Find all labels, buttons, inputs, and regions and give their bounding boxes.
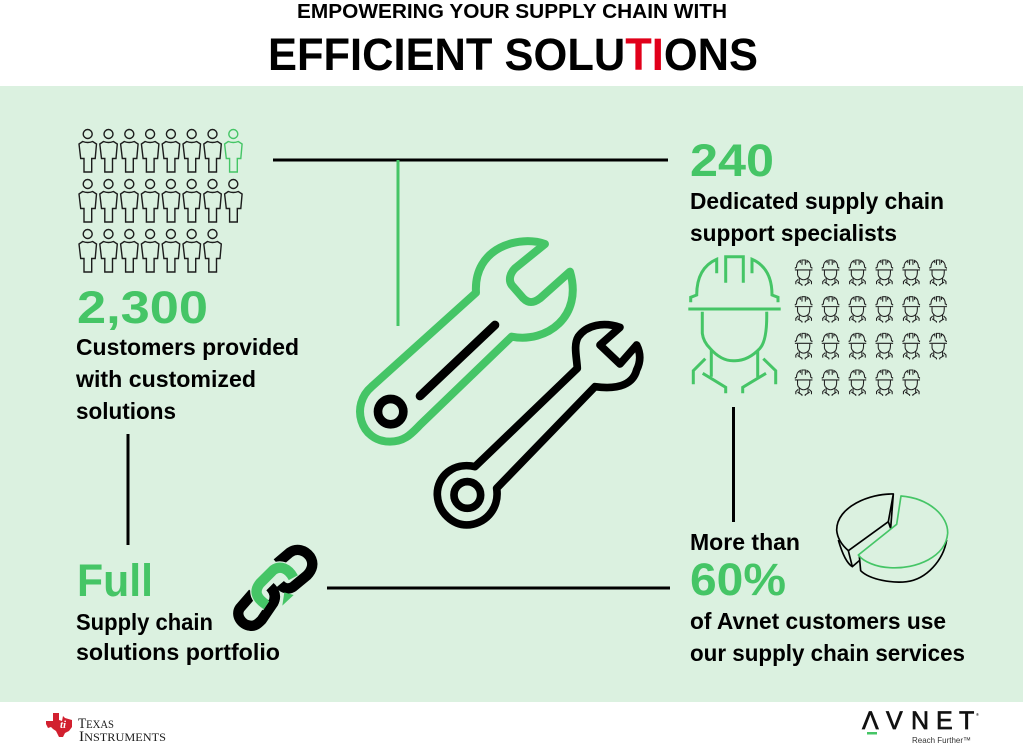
stat: 2,300 customers: 2,300 bbox=[77, 282, 208, 333]
stat: full portfolio: solutions portfolio bbox=[76, 639, 280, 665]
stat: more than 60% bbox=[690, 529, 965, 666]
connector: left vertical bbox=[126, 434, 130, 545]
title bbox=[268, 1, 758, 80]
title: EMPOWERING YOUR SUPPLY CHAIN WITH bbox=[297, 1, 727, 23]
icon: large green worker with hard hat bbox=[688, 257, 781, 393]
stat: 2,300 customers: Customers provided bbox=[76, 334, 299, 360]
logo: Texas Instruments: ti bbox=[60, 719, 67, 731]
stat: full portfolio: Supply chain bbox=[76, 609, 213, 635]
connector: green vertical to wrench bbox=[396, 160, 400, 326]
stat: full portfolio: Full bbox=[77, 555, 153, 606]
logo: Texas Instruments bbox=[46, 713, 166, 744]
icon: customers pictogram bbox=[79, 130, 242, 272]
stat: more than 60%: of Avnet customers use bbox=[690, 608, 946, 634]
logo: Texas Instruments: TEXAS bbox=[78, 716, 114, 732]
icon: green wrench bbox=[360, 241, 573, 442]
stat: full portfolio bbox=[76, 555, 280, 665]
stat: more than 60%: More than bbox=[690, 529, 800, 555]
icon: chain link bbox=[238, 550, 312, 626]
stat: 240 specialists: Dedicated supply chain bbox=[690, 188, 944, 214]
stat: 240 specialists bbox=[690, 135, 944, 246]
stat: 2,300 customers: solutions bbox=[76, 398, 176, 424]
icon: black wrench bbox=[437, 325, 640, 525]
connector: bottom horizontal bbox=[327, 586, 670, 590]
stat: 2,300 customers bbox=[75, 282, 299, 424]
connector: top horizontal bbox=[273, 158, 668, 162]
logo: Avnet: ® bbox=[976, 712, 979, 717]
icon: specialists pictogram bbox=[795, 260, 947, 396]
stat: 240 specialists: support specialists bbox=[690, 220, 897, 246]
stat: 240 specialists: 240 bbox=[690, 135, 774, 186]
connector: right vertical bbox=[732, 407, 735, 522]
title: EFFICIENT SOLUTIONS bbox=[268, 29, 758, 80]
stat: more than 60%: our supply chain services bbox=[690, 640, 965, 666]
icon: pie chart bbox=[837, 494, 948, 582]
logo: Avnet: ΛVNET bbox=[862, 707, 974, 735]
stat: more than 60%: 60% bbox=[690, 554, 786, 605]
stat: 2,300 customers: with customized bbox=[75, 366, 256, 392]
